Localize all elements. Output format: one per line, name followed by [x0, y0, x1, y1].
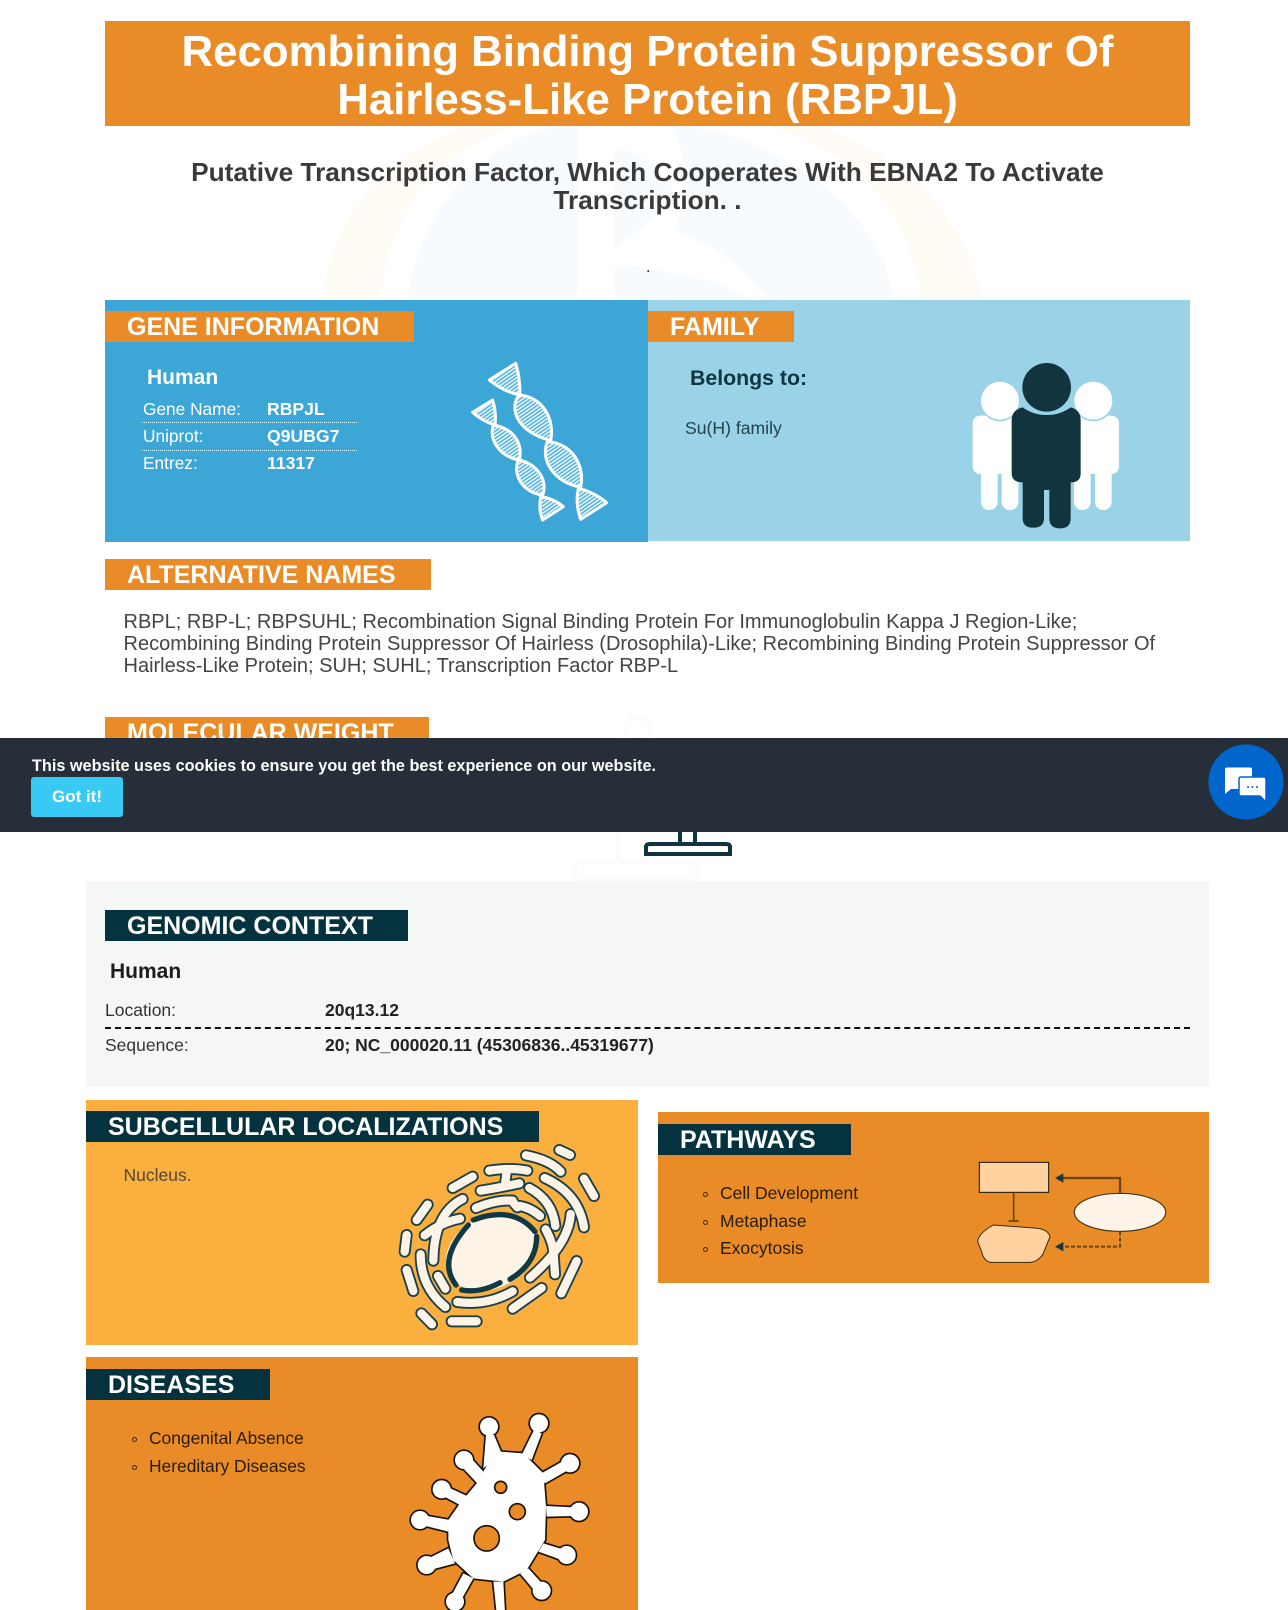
- gene table: Uniprot:: [143, 426, 204, 446]
- heading: diseases: DISEASES: [108, 1371, 234, 1399]
- text: alternative names: Hairless-Like Protein; SUH; SUHL; Transcription Factor RBP-L: [124, 655, 678, 677]
- button: got it: Got it!: [52, 787, 102, 806]
- cookie banner: [0, 738, 1288, 832]
- heading: pathways: [658, 1124, 851, 1155]
- list: pathways: Metaphase: [720, 1211, 807, 1231]
- gene table: Entrez:: [143, 453, 198, 473]
- heading: pathways: PATHWAYS: [680, 1126, 816, 1154]
- gene table: Gene Name:: [143, 399, 241, 419]
- subtitle: Putative Transcription Factor, Which Cooperates With EBNA2 To Activate: [191, 157, 1104, 187]
- heading: subcellular: SUBCELLULAR LOCALIZATIONS: [108, 1113, 503, 1141]
- subtitle: Transcription. .: [553, 185, 742, 215]
- heading: family: FAMILY: [670, 313, 759, 341]
- cookie message: This website uses cookies to ensure you get the best experience on our website.: [32, 757, 656, 775]
- icon: organelle: [398, 1144, 600, 1330]
- gene table: Q9UBG7: [267, 426, 339, 446]
- panel: family: [648, 300, 1190, 541]
- text: nucleus: Nucleus.: [124, 1165, 192, 1185]
- belongs to label: Belongs to:: [690, 366, 807, 390]
- location row: Location:: [105, 1000, 176, 1020]
- text: alternative names: Recombining Binding Protein Suppressor Of Hairless (Drosophila)-Like; Recombining Binding Protein Suppressor Of: [124, 633, 1155, 655]
- dot text: .: [646, 259, 650, 276]
- list: pathways: Cell Development: [720, 1183, 858, 1203]
- heading: genomic context: GENOMIC CONTEXT: [127, 912, 373, 940]
- text: alternative names: RBPL; RBP-L; RBPSUHL; Recombination Signal Binding Protein For Immunoglobulin Kappa J Region-Like;: [124, 611, 1077, 633]
- sequence row: Sequence:: [105, 1035, 189, 1055]
- background watermark: [322, 126, 982, 300]
- icon: virus: [409, 1412, 590, 1610]
- panel: diseases: [86, 1357, 638, 1610]
- family name: Su(H) family: [685, 418, 782, 438]
- sequence row: [105, 1035, 654, 1055]
- heading: diseases: [86, 1369, 270, 1400]
- heading: molecular weight: MOLECULAR WEIGHT: [127, 719, 394, 747]
- list: diseases: Hereditary Diseases: [149, 1456, 306, 1476]
- panel: gene information: [105, 300, 648, 542]
- heading: gene information: GENE INFORMATION: [127, 313, 379, 341]
- icon: pathway diagram: [977, 1162, 1166, 1263]
- list: diseases: [132, 1428, 306, 1476]
- list: pathways: Exocytosis: [720, 1238, 804, 1258]
- list: pathways: [703, 1183, 858, 1258]
- gene table: [142, 399, 357, 473]
- species label: Human: [147, 366, 218, 389]
- button: got it: [31, 777, 123, 817]
- text: alternative names: [124, 611, 1156, 677]
- icon: chat button: [1208, 744, 1284, 820]
- panel: genomic context: [86, 881, 1209, 1087]
- panel: pathways: [658, 1112, 1209, 1283]
- subtitle: [191, 157, 1104, 215]
- heading: alternative names: ALTERNATIVE NAMES: [127, 561, 396, 589]
- title: Recombining Binding Protein Suppressor Of: [182, 27, 1113, 76]
- title: Hairless-Like Protein (RBPJL): [337, 75, 958, 124]
- title: [105, 21, 1190, 126]
- gene table: 11317: [267, 453, 315, 473]
- location row: 20q13.12: [325, 1000, 399, 1020]
- list: diseases: Congenital Absence: [149, 1428, 304, 1448]
- sequence row: 20; NC_000020.11 (45306836..45319677): [325, 1035, 654, 1055]
- species label: Human: [110, 960, 181, 983]
- icon: dna: [471, 362, 608, 522]
- icon: monitor stand: [644, 832, 732, 856]
- gene table: RBPJL: [267, 399, 325, 419]
- heading: family: [648, 311, 794, 342]
- location row: [105, 1000, 399, 1020]
- panel: subcellular localizations: [86, 1100, 638, 1345]
- icon: people: [972, 363, 1119, 528]
